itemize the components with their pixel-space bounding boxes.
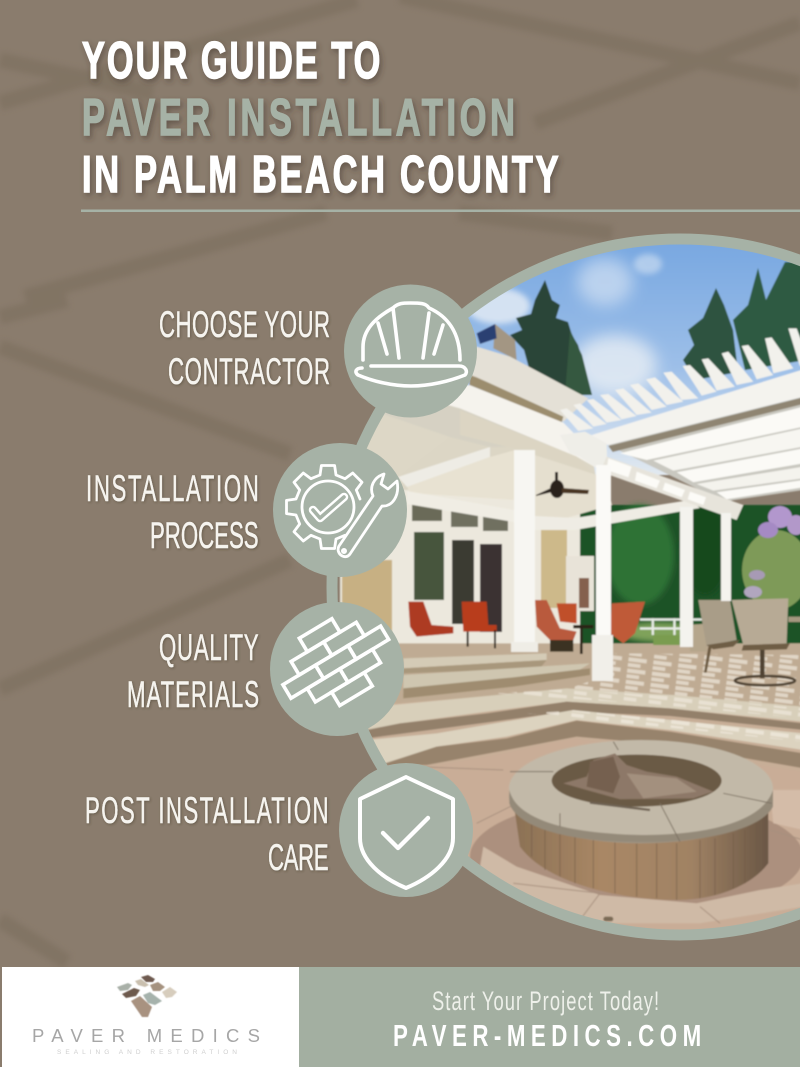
trees [510, 262, 800, 395]
step label: quality materials [127, 627, 259, 715]
step label: installation process [86, 468, 259, 556]
decorative ring around photo [332, 239, 800, 935]
footer panel: call to action: Start Your Project Today! [432, 985, 659, 1016]
columns [511, 450, 731, 681]
title: YOUR GUIDE TO [82, 32, 380, 90]
fire pit [509, 740, 773, 900]
circle: installation process with gear and wrench icon [273, 443, 407, 577]
logo mark: paver tiles [117, 975, 177, 1017]
title divider [81, 210, 800, 212]
sky [467, 244, 800, 476]
footer panel: call to action [299, 967, 800, 1067]
footer panel: logo: SEALING AND RESTORATION [57, 1049, 237, 1056]
icon: shield check [360, 777, 453, 888]
ceiling fan [536, 472, 589, 498]
footer panel: call to action: PAVER-MEDICS.COM [393, 1018, 701, 1053]
dining chairs [688, 598, 800, 685]
step label: post installation care: POST INSTALLATION [85, 790, 329, 831]
lilac bush [742, 506, 800, 610]
house roof, ceiling, wall and windows [340, 324, 700, 655]
roof and chimney [448, 324, 594, 466]
circle: post installation care with shield icon [339, 763, 473, 897]
step label: installation process: INSTALLATION [86, 468, 259, 509]
footer panel: logo [2, 967, 299, 1067]
title: IN PALM BEACH COUNTY [82, 146, 559, 204]
step label: choose your contractor [159, 304, 330, 392]
red lounge chairs [408, 600, 645, 654]
icon: hard hat [356, 303, 466, 386]
step label: quality materials: QUALITY [159, 627, 259, 668]
step label: post installation care: CARE [268, 837, 329, 878]
circle: choose your contractor with helmet icon [344, 284, 477, 418]
icon: paver bricks [267, 599, 405, 725]
photo: patio with pergola and fire pit [330, 235, 800, 940]
icon: gear, check and wrench [286, 466, 398, 557]
porch soffits [398, 447, 700, 531]
patio and sunken steps [368, 642, 800, 930]
title: PAVER INSTALLATION [82, 89, 515, 147]
step label: quality materials: MATERIALS [127, 674, 259, 715]
step label: post installation care [85, 790, 329, 878]
circle: quality materials with bricks icon [267, 599, 405, 736]
step label: installation process: PROCESS [150, 515, 259, 556]
back forest [570, 504, 800, 650]
fence and grass [640, 618, 703, 645]
step label: choose your contractor: CONTRACTOR [168, 351, 330, 392]
title [82, 32, 559, 204]
pergola [560, 328, 800, 520]
patio furniture [408, 598, 800, 685]
footer panel: logo: PAVER MEDICS [32, 1025, 260, 1046]
step label: choose your contractor: CHOOSE YOUR [159, 304, 330, 345]
